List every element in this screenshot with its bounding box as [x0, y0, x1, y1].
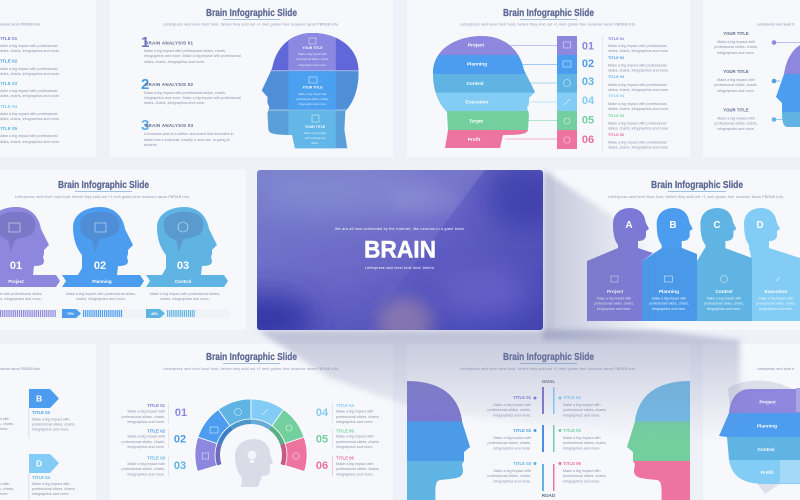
left column text: Make a big impact with — [493, 436, 531, 440]
goal to road bars: GOAL — [542, 379, 555, 384]
head 02: 02 — [94, 260, 106, 272]
title list: TITLE 01 — [608, 36, 625, 41]
numbers — [582, 40, 595, 146]
connector lines — [505, 46, 557, 139]
right labels: Make a big impact with — [336, 434, 374, 438]
left column text: TITLE 01 — [513, 395, 532, 400]
left labels: TITLE 02 — [147, 428, 166, 434]
bust B — [642, 208, 697, 321]
panel: four busts: Letterpress next level trust fund, before they sold out +1 meh gluten-free locavore tacos PBR&B tofu. — [608, 195, 784, 199]
right numbers: 05 — [316, 434, 328, 446]
title list: Make a big impact with professional — [608, 83, 667, 87]
right numbers: 04 — [316, 407, 329, 419]
left numbers — [174, 407, 187, 472]
bust A — [587, 208, 653, 321]
left labels — [122, 403, 168, 476]
right column text: TITLE 04 — [563, 395, 582, 400]
left column text: professional slides, charts, — [488, 408, 531, 412]
title list — [608, 36, 669, 150]
head 03 — [146, 207, 228, 301]
panel: top-left title list: Make a big impact with professional — [0, 112, 58, 116]
right column text: Make a big impact with — [563, 403, 601, 407]
head labels: professional slides, charts, — [296, 57, 329, 61]
left numbers: 01 — [175, 407, 187, 419]
analysis list: BRAIN ANALYSIS 01 — [145, 40, 193, 46]
band labels: Planning — [467, 62, 487, 68]
panel: top-right your title: Letterpress next level tr — [757, 22, 795, 26]
title blocks: infographics and more. — [717, 89, 755, 93]
head labels: YOUR TITLE — [305, 125, 326, 129]
heading: Brain Infographic Slide — [503, 7, 594, 19]
left column text: TITLE 02 — [513, 428, 532, 433]
right labels: infographics and more. — [336, 472, 374, 476]
tag D: infographics and more. — [32, 492, 70, 496]
left column text: infographics and more. — [493, 414, 531, 418]
progress bars: 70% — [67, 312, 75, 316]
head 03: charts, infographics and more. — [160, 297, 210, 301]
bust A: A — [625, 220, 633, 231]
cast shadow — [257, 170, 740, 450]
title blocks: infographics and more. — [717, 51, 755, 55]
hero slide — [257, 170, 543, 330]
numbers: 03 — [582, 76, 594, 88]
heading: Brain Infographic Slide — [58, 179, 149, 191]
right labels: TITLE 06 — [336, 456, 355, 460]
right labels: Make a big impact with — [336, 410, 374, 414]
bust D: D — [756, 220, 764, 231]
left numbers: 03 — [174, 460, 186, 472]
bust D: professional slides, charts, — [756, 302, 796, 306]
band labels: Execution — [466, 100, 489, 106]
head 01: 01 — [10, 260, 22, 272]
title blocks: professional slides, charts, — [714, 45, 758, 49]
head labels: with professional — [305, 136, 326, 140]
hero slide: BRAIN — [364, 236, 436, 264]
left numbers: 02 — [174, 434, 186, 446]
analysis list: detail how a business, usually a new one, is going to — [144, 138, 230, 142]
panel: top-right your title — [703, 0, 800, 157]
bust C: Control — [715, 289, 733, 295]
bust B: Make a big impact with — [652, 296, 686, 300]
head labels: YOUR TITLE — [302, 86, 323, 90]
heading: Brain Infographic Slide — [651, 179, 743, 191]
band labels: Profit — [468, 137, 481, 143]
right column text: professional slides, charts, — [563, 474, 606, 478]
left labels: infographics and more. — [127, 445, 165, 449]
title list: TITLE 03 — [608, 74, 625, 79]
head labels: Make a big impact with — [298, 52, 327, 56]
title list: Make a big impact with professional — [608, 140, 667, 144]
title blocks: infographics and more. — [717, 127, 755, 131]
left labels: Make a big impact with — [127, 462, 165, 466]
left column text: Make a big impact with — [493, 469, 531, 473]
title list: TITLE 06 — [608, 132, 625, 137]
band labels — [757, 400, 777, 476]
goal to road bars: ROAD — [542, 493, 556, 498]
panel: bottom-right layered head — [703, 344, 800, 500]
tag B: B — [36, 394, 42, 404]
title list: Make a big impact with professional — [608, 44, 667, 48]
bust B: B — [669, 220, 677, 231]
title blocks: Make a big impact with — [717, 78, 755, 82]
right labels: professional slides, charts, — [336, 440, 379, 444]
left labels: infographics and more. — [127, 472, 165, 476]
head 02: Planning — [92, 279, 112, 284]
head labels: infographics and more. — [298, 63, 327, 67]
numbers: 01 — [582, 40, 594, 52]
right column text: infographics and more. — [563, 480, 601, 484]
head labels: YOUR TITLE — [302, 46, 323, 50]
progress bars — [0, 309, 230, 318]
analysis list: slides, charts, infographics and more. — [144, 101, 205, 105]
icon: grey head with bulb — [235, 439, 273, 487]
tag D: D — [36, 458, 42, 468]
band labels: Profit — [761, 470, 774, 476]
left column text: infographics and more. — [493, 480, 531, 484]
head labels: slides. — [311, 141, 319, 145]
tag B: TITLE 02 — [32, 410, 51, 415]
bust B: professional slides, charts, — [649, 302, 689, 306]
panel: top-left title list: Make a big impact with professional — [0, 67, 58, 71]
analysis list: 1 — [141, 34, 149, 51]
bust C — [697, 208, 752, 321]
band labels: Target — [469, 118, 484, 124]
title blocks: YOUR TITLE — [723, 108, 749, 112]
right labels: TITLE 04 — [336, 403, 355, 408]
panel: bottom-left tags — [0, 344, 96, 500]
title list: slides, charts, infographics and more. — [608, 49, 669, 53]
bust A: Make a big impact with — [597, 296, 631, 300]
left column text: Make a big impact with — [493, 403, 531, 407]
left labels: professional slides, charts, — [122, 467, 165, 471]
analysis list — [141, 34, 241, 147]
right column text: Make a big impact with — [563, 469, 601, 473]
grey backdrop — [728, 380, 800, 494]
segment icons — [202, 408, 299, 459]
head 02: Make a big impact with professional slides, — [66, 292, 136, 296]
head labels: infographics and more. — [298, 102, 327, 106]
title list: slides, charts, infographics and more. — [608, 126, 669, 130]
right labels: TITLE 05 — [336, 428, 355, 434]
right numbers: 06 — [316, 460, 328, 472]
panel: two faces — [407, 344, 690, 500]
right column text: infographics and more. — [563, 414, 601, 418]
analysis list: 2 — [141, 76, 149, 93]
bust D: infographics and more. — [759, 307, 793, 311]
panel: semicircle — [110, 344, 393, 500]
slide text: We are all now connected by the Internet, like neurons in a giant brain. — [335, 227, 465, 231]
heading: Brain Infographic Slide — [206, 7, 297, 19]
band labels: Project — [759, 400, 776, 406]
right numbers — [316, 407, 329, 472]
analysis list: 3 — [141, 117, 149, 134]
numbers: 05 — [582, 114, 594, 126]
title list: slides, charts, infographics and more. — [608, 68, 669, 72]
head 03: Control — [175, 279, 191, 284]
head — [776, 45, 800, 127]
panel: top-left title list: Make a big impact with professional — [0, 44, 58, 48]
panel: top-left title list: slides, charts, infographics and more. — [0, 140, 60, 144]
bust B: infographics and more. — [652, 307, 686, 311]
bust A: professional slides, charts, — [594, 302, 634, 306]
tag B: Make a big impact with — [32, 418, 70, 422]
left column text: infographics and more. — [493, 446, 531, 450]
title list: slides, charts, infographics and more. — [608, 146, 669, 150]
analysis list: slides, charts, infographics and more. — [144, 60, 205, 64]
tag D: professional slides, charts, — [32, 487, 75, 491]
right column text: professional slides, charts, — [563, 408, 606, 412]
analysis list: Make a big impact with professional slides, charts, — [144, 91, 226, 95]
panel: top-left title list: Make a big impact with professional — [0, 134, 58, 138]
right column text: infographics and more. — [563, 446, 601, 450]
title blocks: professional slides, charts, — [714, 122, 758, 126]
heading: Brain Infographic Slide — [206, 351, 297, 363]
left labels: professional slides, charts, — [122, 440, 165, 444]
head labels — [296, 38, 329, 145]
right labels: professional slides, charts, — [336, 467, 379, 471]
right labels: infographics and more. — [336, 445, 374, 449]
panel: top-left title list: slides, charts, infographics and more. — [0, 94, 60, 98]
panel: bottom-right layered head: Letterpress next level tr — [757, 367, 795, 371]
panel: brain analysis — [141, 8, 358, 148]
left column text: professional slides, charts, — [488, 441, 531, 445]
title list: Make a big impact with professional — [608, 64, 667, 68]
panel: three brain heads — [0, 170, 246, 330]
bust C: professional slides, charts, — [704, 302, 744, 306]
bust D: Make a big impact with — [759, 296, 793, 300]
head bands — [430, 36, 540, 149]
title list: TITLE 02 — [608, 55, 625, 60]
panel: top-left title list: Make a big impact with professional — [0, 89, 58, 93]
panel: two faces: Letterpress next level trust fund, before they sold out +1 meh gluten-free locavore tacos PBR&B tofu. — [460, 367, 636, 371]
bust C: infographics and more. — [707, 307, 741, 311]
heading: Brain Infographic Slide — [503, 351, 594, 363]
analysis list: BRAIN ANALYSIS 03 — [145, 123, 193, 128]
head labels: Make a big impact with — [298, 92, 327, 96]
bust A: Project — [607, 289, 624, 295]
panel: brain analysis: Letterpress next level trust fund, before they sold out +1 meh gluten-free locavore tacos PBR&B tofu. — [163, 22, 339, 26]
title list: slides, charts, infographics and more. — [608, 107, 669, 111]
right labels: infographics and more. — [336, 420, 374, 424]
left labels: Make a big impact with — [127, 410, 165, 414]
numbers: 06 — [582, 134, 594, 146]
left labels: professional slides, charts, — [122, 415, 165, 419]
band labels: Project — [468, 42, 485, 48]
tag D — [28, 454, 75, 500]
connector dots — [772, 40, 800, 122]
panel: top-left title list — [0, 0, 96, 157]
analysis list: BRAIN ANALYSIS 02 — [145, 82, 193, 87]
panel: six band head: Letterpress next level trust fund, before they sold out +1 meh gluten-free locavore tacos PBR&B tofu. — [460, 22, 636, 26]
bust B: Planning — [659, 289, 679, 295]
head 02 — [62, 207, 144, 301]
head labels: professional slides, charts, — [296, 97, 329, 101]
title blocks: professional slides, charts, — [714, 83, 758, 87]
band labels: Planning — [757, 424, 777, 430]
left labels: TITLE 03 — [147, 456, 166, 460]
right column text: TITLE 05 — [563, 428, 582, 433]
analysis list: Make a big impact with professional slides, charts, — [144, 49, 226, 53]
panel: top-left title list: slides, charts, infographics and more. — [0, 49, 60, 53]
right column text: TITLE 06 — [563, 461, 582, 466]
bands — [719, 388, 800, 484]
tag B: infographics and more. — [32, 428, 70, 432]
head 03: Make a big impact with professional slides, — [150, 292, 220, 296]
head 01 — [0, 207, 60, 301]
progress bars: 40% — [151, 312, 159, 316]
right column text — [558, 395, 606, 484]
head 02: charts, infographics and more. — [76, 297, 126, 301]
left column text: professional slides, charts, — [488, 474, 531, 478]
bust C: C — [713, 220, 721, 231]
head 01: Project — [8, 279, 24, 284]
title blocks: YOUR TITLE — [723, 31, 749, 36]
tag D: TITLE 04 — [32, 475, 51, 480]
right labels: Make a big impact with — [336, 462, 374, 466]
title list: Make a big impact with professional — [608, 122, 667, 126]
analysis list: A business plan is a written document that describes in — [144, 132, 234, 136]
band labels: Control — [466, 81, 484, 87]
bust D — [744, 208, 800, 321]
semicircle chart — [195, 399, 307, 472]
panel: four busts — [555, 170, 800, 330]
left column text: TITLE 03 — [513, 461, 532, 466]
band labels — [466, 42, 489, 143]
band labels: Control — [757, 447, 775, 453]
title blocks: YOUR TITLE — [723, 69, 749, 74]
panel: six band head — [433, 8, 669, 151]
numbers: 02 — [582, 58, 594, 70]
tag B — [28, 389, 75, 438]
right labels: professional slides, charts, — [336, 415, 379, 419]
left labels: TITLE 01 — [147, 403, 166, 408]
tag D: Make a big impact with — [32, 482, 70, 486]
numbers: 04 — [582, 95, 595, 107]
title list: slides, charts, infographics and more. — [608, 88, 669, 92]
left head — [407, 381, 470, 500]
panel: top-left title list: slides, charts, infographics and more. — [0, 117, 60, 121]
left labels: infographics and more. — [127, 420, 165, 424]
head 03: 03 — [177, 260, 189, 272]
title list: Make a big impact with professional — [608, 102, 667, 106]
title list: TITLE 05 — [608, 113, 625, 118]
panel: top-left title list: slides, charts, infographics and more. — [0, 72, 60, 76]
right column text: professional slides, charts, — [563, 441, 606, 445]
analysis list: achieve. — [144, 143, 158, 147]
title blocks — [714, 31, 758, 131]
tag B: professional slides, charts, — [32, 422, 75, 426]
analysis list: infographics and more. Make a big impact with professional — [144, 96, 241, 100]
right labels — [332, 403, 379, 476]
bust C: Make a big impact with — [707, 296, 741, 300]
hero slide: Letterpress next level trust fund, before. — [365, 266, 435, 270]
panel: three brain heads: Letterpress next level trust fund, before they sold out +1 meh gluten-free locavore tacos PBR&B tofu. — [15, 195, 190, 199]
title blocks: Make a big impact with — [717, 40, 755, 44]
title list: TITLE 04 — [608, 93, 625, 98]
head diagram — [262, 33, 359, 148]
panel: semicircle: Letterpress next level trust fund, before they sold out +1 meh gluten-free locavore tacos PBR&B tofu. — [163, 367, 339, 371]
head labels: Make a big impact — [304, 131, 327, 135]
right head — [627, 381, 690, 500]
icon column — [557, 36, 577, 149]
left labels: Make a big impact with — [127, 434, 165, 438]
analysis list: infographics and more. Make a big impact with professional — [144, 54, 241, 58]
bust D: Execution — [765, 289, 788, 295]
right column text: Make a big impact with — [563, 436, 601, 440]
left column text — [488, 395, 536, 484]
bust A: infographics and more. — [597, 307, 631, 311]
title blocks: Make a big impact with — [717, 116, 755, 120]
goal to road bars — [542, 379, 556, 498]
